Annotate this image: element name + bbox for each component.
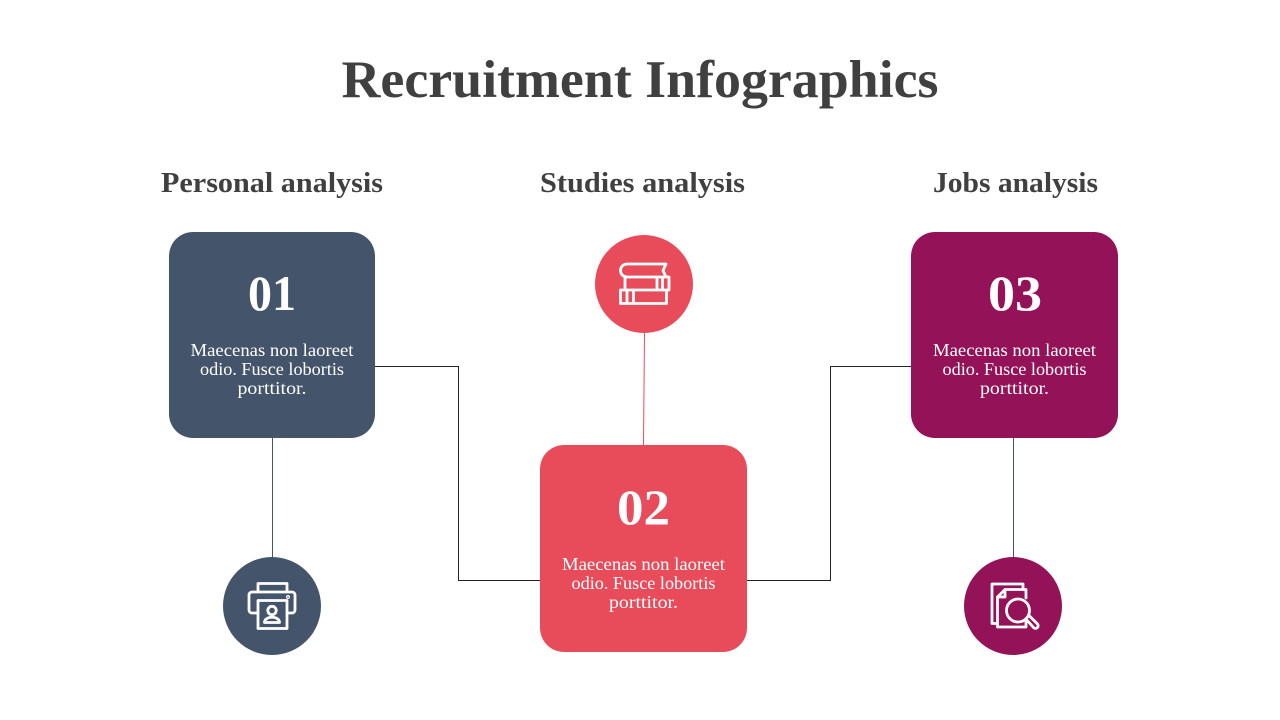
number 03: 03 [988,265,1042,321]
connector: card 02 to card 03 [747,366,911,580]
text block 01 [190,340,354,398]
heading: personal analysis: Personal analysis [161,167,383,199]
number 02: 02 [617,479,670,535]
text block 02 [562,554,725,612]
panel: card 02 [540,445,747,652]
number 01: 01 [248,265,296,321]
connector: card 03 to search icon [1012,438,1014,557]
icon: documents with magnifier [964,557,1062,655]
heading: jobs analysis: Jobs analysis [933,167,1098,199]
panel: card 01 [169,232,375,438]
connector: books icon to card 02 [644,332,645,445]
icon: books [595,235,693,333]
text block 01: porttitor. [238,378,306,398]
text block 01: Maecenas non laoreet [190,340,354,360]
text block 03: Maecenas non laoreet [933,340,1096,360]
text block 03: porttitor. [980,378,1049,398]
text block 03 [933,340,1096,398]
text block 02: porttitor. [609,592,678,612]
connector: card 01 to printer icon [272,438,274,557]
icon: printer with person [223,557,321,655]
text block 02: odio. Fusce lobortis [572,573,716,593]
text block 02: Maecenas non laoreet [562,554,725,574]
text block 01: odio. Fusce lobortis [200,359,344,379]
connector: card 01 to card 02 [375,366,540,580]
title: Recruitment Infographics [342,51,938,109]
panel: card 03 [911,232,1118,438]
heading: studies analysis: Studies analysis [540,167,745,199]
text block 03: odio. Fusce lobortis [942,359,1087,379]
